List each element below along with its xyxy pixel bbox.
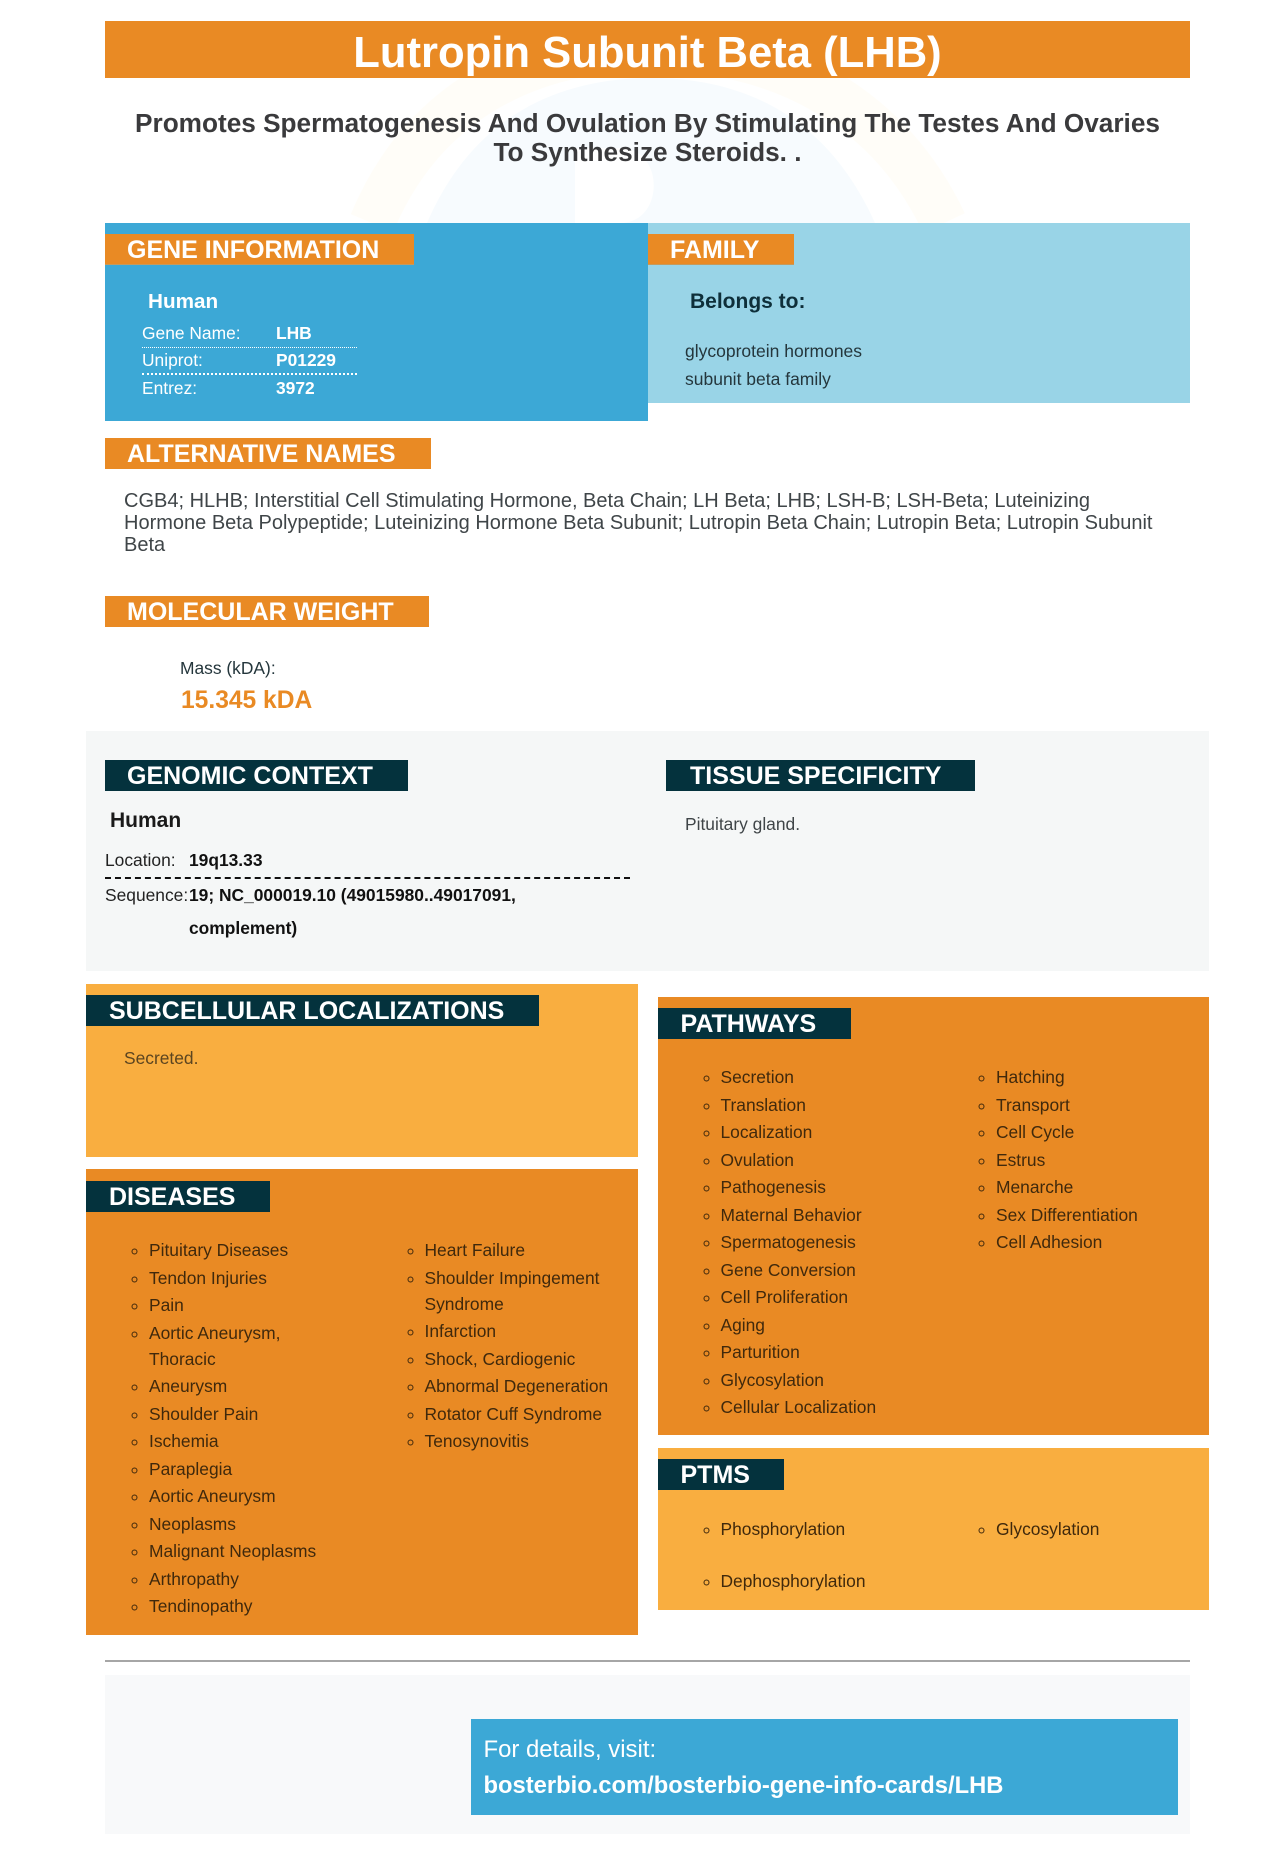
gene name row: LHB	[276, 323, 312, 343]
pathways list column 1: Localization	[720, 1122, 812, 1142]
gene name row: Gene Name:	[142, 323, 241, 343]
diseases list column 2	[408, 1240, 608, 1451]
subtitle: To Synthesize Steroids. .	[493, 137, 802, 167]
uniprot row: P01229	[276, 350, 336, 370]
ptms list column 1: Phosphorylation	[720, 1518, 845, 1538]
heading: diseases: DISEASES	[109, 1183, 235, 1211]
entrez row: 3972	[276, 378, 315, 398]
tissue text: Pituitary gland.	[685, 814, 800, 834]
pathways list column 2: Transport	[996, 1094, 1070, 1114]
alternative names text: CGB4; HLHB; Interstitial Cell Stimulating Hormone, Beta Chain; LH Beta; LHB; LSH-B; LSH-Beta; Luteinizing	[124, 490, 1090, 512]
pathways list column 2: Cell Cycle	[996, 1122, 1074, 1142]
diseases list column 1: Aortic Aneurysm	[149, 1486, 276, 1506]
pathways list column 1: Spermatogenesis	[720, 1232, 856, 1252]
entrez row	[142, 378, 315, 398]
alternative names text	[124, 490, 1152, 556]
pathways list column 2: Estrus	[996, 1150, 1045, 1170]
sequence row: complement)	[189, 918, 297, 938]
diseases list column 2: Rotator Cuff Syndrome	[424, 1404, 602, 1424]
diseases list column 2: Shoulder Impingement Syndrome	[424, 1268, 599, 1314]
location row: 19q13.33	[189, 850, 262, 870]
subtitle: Promotes Spermatogenesis And Ovulation By Stimulating The Testes And Ovaries	[135, 108, 1160, 138]
diseases list column 2: Tenosynovitis	[424, 1431, 529, 1451]
uniprot row: Uniprot:	[142, 350, 203, 370]
title banner: Lutropin Subunit Beta (LHB)	[353, 29, 942, 77]
heading: pathways	[658, 1008, 851, 1039]
callout: details link	[471, 1719, 1178, 1815]
pathways list column 2: Cell Adhesion	[996, 1232, 1102, 1252]
diseases list column 1: Tendon Injuries	[149, 1268, 267, 1288]
pathways list column 1: Secretion	[720, 1067, 794, 1087]
heading: subcellular localizations: SUBCELLULAR LOCALIZATIONS	[109, 997, 504, 1025]
ptms list column 1: Dephosphorylation	[720, 1570, 866, 1590]
localization text: Secreted.	[124, 1048, 198, 1068]
watermark logo	[340, 78, 980, 223]
diseases list column 1: Pain	[149, 1295, 184, 1315]
pathways list column 1: Cellular Localization	[720, 1397, 876, 1417]
pathways list column 1: Maternal Behavior	[720, 1204, 862, 1224]
heading: diseases	[86, 1181, 270, 1212]
diseases list column 1: Paraplegia	[149, 1458, 232, 1478]
uniprot row	[142, 347, 357, 375]
diseases list column 1: Ischemia	[149, 1431, 219, 1451]
pathways list column 1: Translation	[720, 1094, 806, 1114]
diseases list column 1: Shoulder Pain	[149, 1404, 258, 1424]
sequence row: 19; NC_000019.10 (49015980..49017091,	[189, 885, 516, 905]
pathways list column 1: Parturition	[720, 1342, 800, 1362]
ptms list column 1	[704, 1518, 866, 1590]
heading: gene information: GENE INFORMATION	[127, 236, 379, 264]
ptms list column 2: Glycosylation	[996, 1518, 1099, 1538]
heading: tissue specificity: TISSUE SPECIFICITY	[690, 762, 941, 790]
heading: genomic context: GENOMIC CONTEXT	[127, 762, 373, 790]
pathways list column 2: Hatching	[996, 1067, 1065, 1087]
heading: molecular weight: MOLECULAR WEIGHT	[127, 598, 394, 626]
diseases list column 1: Aneurysm	[149, 1376, 227, 1396]
family text: glycoprotein hormones	[685, 341, 862, 361]
diseases list column 1: Malignant Neoplasms	[149, 1541, 316, 1561]
pathways list column 2: Menarche	[996, 1177, 1073, 1197]
species label: Human	[110, 809, 181, 832]
pathways list column 1: Gene Conversion	[720, 1260, 856, 1280]
diseases list column 2: Infarction	[424, 1321, 496, 1341]
diseases list column 1: Neoplasms	[149, 1514, 236, 1534]
panel: family	[648, 223, 1190, 403]
belongs to label: Belongs to:	[690, 290, 806, 313]
diseases list column 1	[132, 1240, 316, 1616]
panel: gene information	[105, 223, 648, 421]
pathways list column 1: Ovulation	[720, 1150, 794, 1170]
diseases list column 2: Abnormal Degeneration	[424, 1376, 608, 1396]
panel: pathways	[658, 996, 1209, 1435]
alternative names text: Hormone Beta Polypeptide; Luteinizing Hormone Beta Subunit; Lutropin Beta Chain; Lutropin Beta; Lutropin Subunit	[124, 512, 1152, 534]
pathways list column 1: Cell Proliferation	[720, 1287, 848, 1307]
panel: subcellular localizations	[86, 984, 638, 1156]
pathways list column 1: Pathogenesis	[720, 1177, 826, 1197]
callout label: For details, visit:	[484, 1736, 656, 1763]
location row: Location:	[105, 850, 176, 870]
heading: family	[648, 234, 794, 265]
sequence row	[105, 885, 516, 938]
mass value: 15.345 kDA	[181, 687, 312, 714]
pathways list column 1	[704, 1067, 876, 1417]
species label: Human	[148, 290, 218, 312]
location row	[105, 847, 630, 879]
entrez row: Entrez:	[142, 378, 197, 398]
heading: pathways: PATHWAYS	[680, 1010, 816, 1038]
panel: ptms	[658, 1448, 1209, 1610]
pathways list column 1: Aging	[720, 1314, 765, 1334]
alternative names text: Beta	[124, 534, 165, 556]
callout url: bosterbio.com/bosterbio-gene-info-cards/LHB	[484, 1772, 1003, 1799]
mass label: Mass (kDA):	[180, 658, 276, 678]
diseases list column 1: Pituitary Diseases	[149, 1240, 288, 1260]
diseases list column 1: Arthropathy	[149, 1568, 239, 1588]
panel: diseases	[86, 1169, 638, 1635]
subtitle	[135, 108, 1160, 167]
pathways list column 2	[978, 1067, 1138, 1252]
family text	[685, 341, 862, 388]
diseases list column 2: Heart Failure	[424, 1240, 525, 1260]
diseases list column 1: Tendinopathy	[149, 1596, 252, 1616]
panel: genomic context and tissue specificity	[86, 731, 1209, 971]
pathways list column 2: Sex Differentiation	[996, 1204, 1138, 1224]
family text: subunit beta family	[685, 368, 831, 388]
heading: alternative names: ALTERNATIVE NAMES	[127, 440, 396, 468]
diseases list column 2: Shock, Cardiogenic	[424, 1348, 575, 1368]
panel: footer	[105, 1675, 1190, 1834]
footer rule	[105, 1660, 1190, 1662]
gene name row	[142, 320, 357, 348]
title banner	[105, 21, 1190, 78]
sequence row: Sequence:	[105, 885, 188, 905]
diseases list column 1: Aortic Aneurysm, Thoracic	[149, 1322, 280, 1368]
heading: ptms: PTMS	[680, 1461, 750, 1489]
heading: family: FAMILY	[670, 236, 759, 264]
pathways list column 1: Glycosylation	[720, 1370, 824, 1390]
heading: ptms	[658, 1459, 784, 1490]
